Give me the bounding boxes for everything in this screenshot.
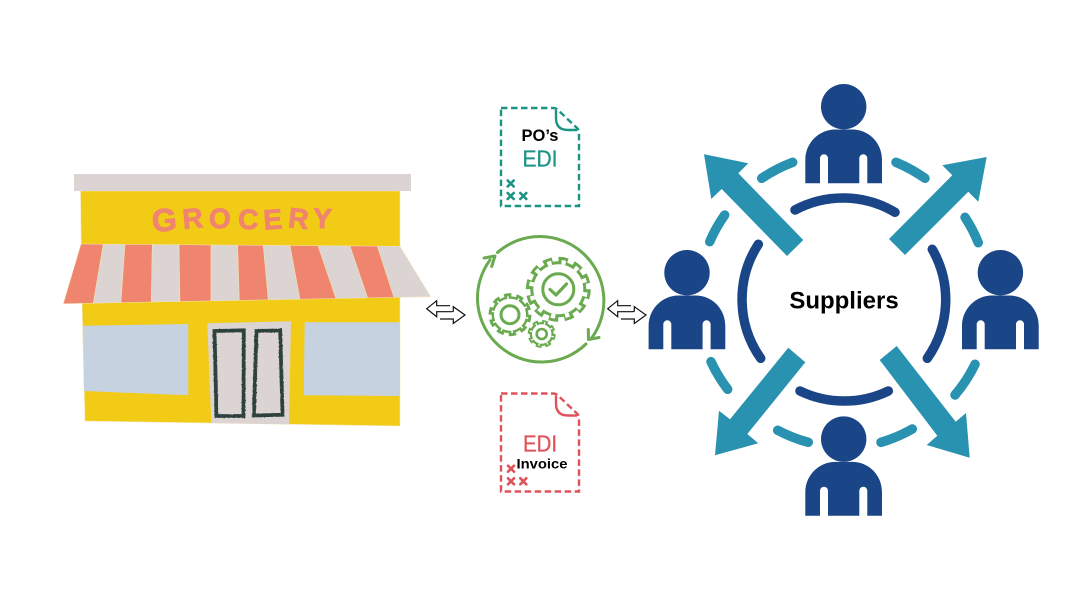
- person: bottom: [805, 416, 882, 516]
- suppliers ring diagram: [649, 84, 1039, 516]
- marks: [508, 466, 526, 484]
- medium gear: [492, 296, 528, 333]
- store: grocery shop: [63, 174, 431, 426]
- person: top: [805, 84, 882, 183]
- document outline: [501, 108, 579, 206]
- store sign: GROCERY: G: [151, 201, 178, 239]
- dark inner ring arcs: [742, 198, 946, 401]
- arrow: top-right: [889, 157, 987, 255]
- store sign: GROCERY: [151, 201, 333, 239]
- store sign: GROCERY: E: [262, 203, 283, 236]
- arrow: store to process two-way: [427, 301, 465, 324]
- store sign: GROCERY: R: [287, 202, 310, 235]
- store right window: [304, 322, 400, 396]
- store sign: GROCERY: Y: [312, 203, 333, 234]
- marks: [508, 180, 526, 199]
- store door: [207, 321, 291, 424]
- store wall: [80, 191, 400, 426]
- store sign: GROCERY: C: [238, 204, 259, 235]
- arrow: top-left: [704, 154, 803, 256]
- arrow: bottom-left: [715, 348, 805, 455]
- document: EDI Invoice: [501, 394, 579, 492]
- store sign: GROCERY: R: [181, 202, 204, 235]
- store awning: [63, 244, 431, 304]
- label: PO's: PO’s: [522, 127, 558, 145]
- document outline: [501, 394, 579, 492]
- teal outer ring dashes: [710, 162, 978, 442]
- document: PO's EDI: [501, 108, 579, 206]
- label: EDI: EDI: [523, 430, 557, 456]
- store roof: [74, 174, 411, 191]
- cycle arrows: [477, 236, 604, 362]
- person: right: [962, 250, 1039, 349]
- label: EDI: EDI: [522, 146, 558, 172]
- arrow: bottom-right: [880, 346, 970, 458]
- label: Suppliers: Suppliers: [789, 288, 899, 314]
- label: Invoice: Invoice: [516, 456, 568, 472]
- document fold: [556, 396, 577, 416]
- store left window: [83, 324, 188, 395]
- person: left: [649, 250, 725, 349]
- arrow: process to suppliers two-way: [608, 301, 646, 324]
- large gear: [530, 261, 587, 318]
- small gear: [530, 322, 554, 346]
- store sign: GROCERY: O: [209, 203, 231, 234]
- document fold: [556, 110, 577, 130]
- process icon: gears in cycle: [477, 236, 604, 362]
